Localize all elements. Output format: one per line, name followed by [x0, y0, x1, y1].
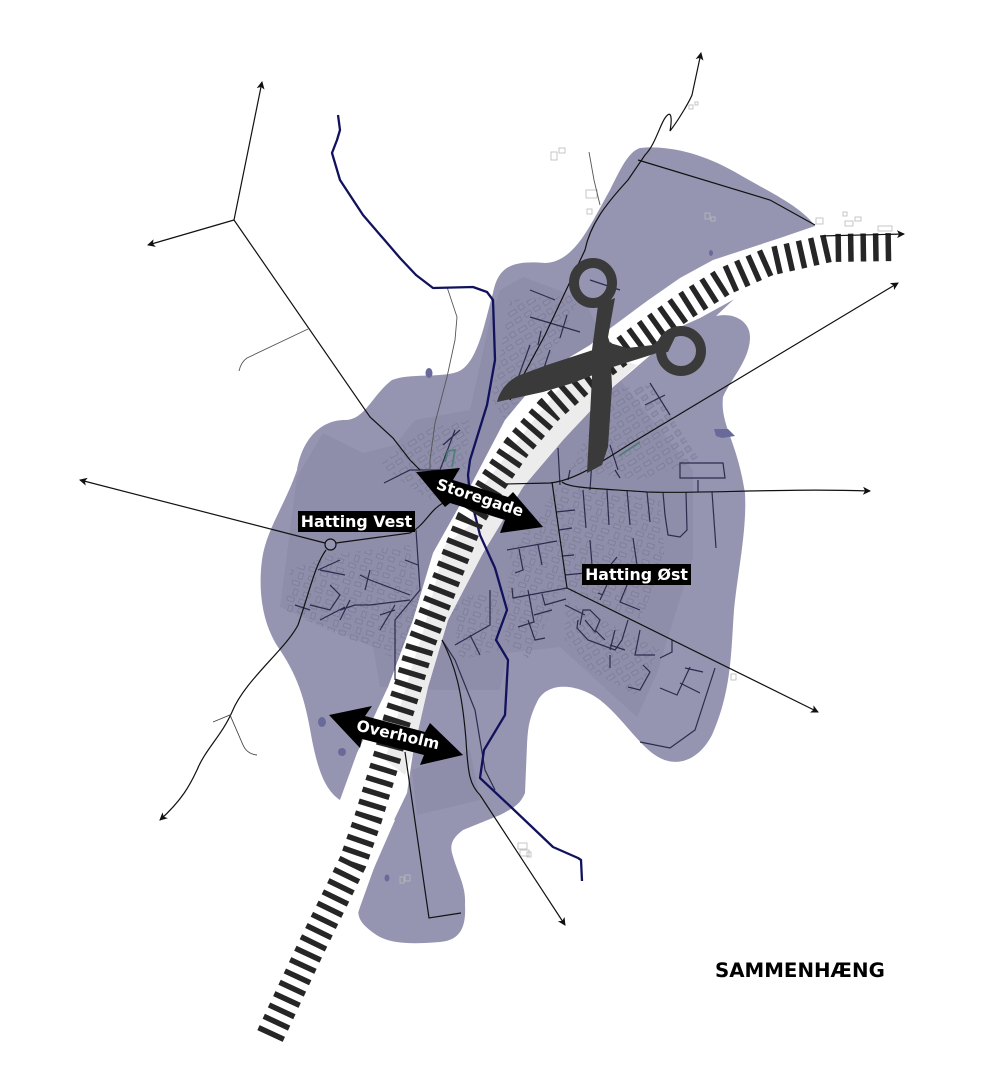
icon: scissors: [497, 263, 701, 473]
arrow: Storegade: [416, 468, 543, 533]
railway corridor: white band: [250, 225, 860, 1060]
side road west: [239, 329, 308, 371]
label: Hatting Øst: Hatting Øst: [585, 565, 688, 584]
local streets: [295, 280, 725, 790]
buildings centre east: [570, 385, 700, 480]
buildings southeast: [565, 600, 660, 695]
road: west arrow with roundabout: [80, 480, 443, 550]
label: Overholm: Overholm: [355, 717, 441, 753]
railway corridor: town section: [385, 350, 637, 775]
river: [332, 115, 582, 881]
panel: settlement area blob: [261, 147, 815, 943]
title: SAMMENHÆNG: [715, 959, 885, 982]
outlying buildings: [400, 102, 892, 883]
railway ties: [270, 247, 896, 1036]
arrow: Overholm: [329, 706, 463, 765]
road: east arrows: [505, 283, 898, 712]
buildings east: [505, 485, 665, 660]
road: end arrow over railway: [820, 234, 904, 236]
water bodies: [318, 250, 735, 882]
faint road north: [430, 287, 457, 480]
road: south-west arrow: [160, 550, 326, 820]
label: Hatting Vest: Hatting Vest: [301, 512, 413, 531]
buildings south centre: [450, 590, 500, 660]
buildings northwest: [380, 420, 470, 500]
buildings north: [492, 295, 580, 420]
road: north-east arrow: [510, 53, 815, 400]
buildings west: [285, 545, 420, 660]
road: south arrows: [405, 640, 565, 925]
label: Storegade: Storegade: [434, 475, 526, 521]
green path: [445, 442, 640, 467]
road: north-west fork: [148, 82, 420, 470]
